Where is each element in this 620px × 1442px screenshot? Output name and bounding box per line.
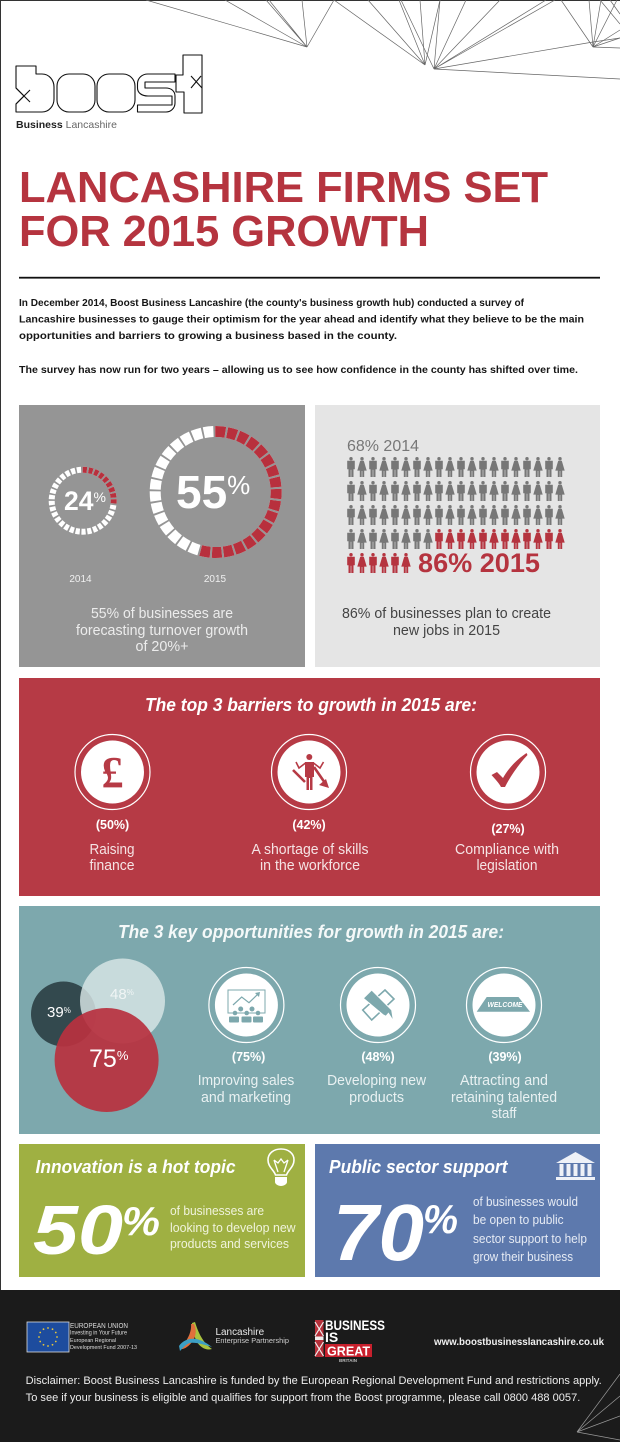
barrier 2 text: in the workforce [260,858,360,874]
icon: tick [470,734,546,810]
big number: 50% [33,1191,160,1269]
description: of businesses are [170,1203,264,1218]
barrier 3 text: Compliance with [455,842,559,858]
caption: 55% of businesses are [91,606,233,622]
description: products and services [170,1236,289,1251]
barrier 3 text [455,822,559,874]
icon: temple [556,1152,595,1180]
big number: 50%: % [122,1198,160,1244]
intro text: opportunities and barriers to growing a business based in the county. [19,331,397,342]
panel: 3 key opportunities [19,906,600,1134]
ring chart: 55% in 2015 [155,432,276,552]
caption [342,606,551,639]
logo: Lancashire Enterprise Partnership [179,1322,289,1351]
opportunity 1 text: (75%) [232,1050,265,1064]
barrier 1 text: finance [90,858,134,874]
pictogram of people [347,457,565,573]
logo: Business is Great Britain [315,1317,385,1363]
opportunity 3 text: Attracting and [460,1073,548,1089]
description [170,1203,296,1251]
description [473,1194,587,1264]
opportunity 1 text: and marketing [201,1090,291,1106]
caption: new jobs in 2015 [393,623,500,639]
opportunity 2 text [327,1050,427,1106]
venn diagram: % [64,1006,71,1015]
logo: Business is Great Britain: IS [325,1329,338,1345]
disclaimer [26,1375,602,1404]
opportunity 3 text [451,1050,557,1122]
label: 55%: 55 [176,466,227,518]
decorative network lines [146,0,620,79]
barrier 2 text [252,818,368,874]
logo: boost Business Lancashire: Business Lancashire [16,119,117,131]
label: 24%: % [93,489,106,505]
label: 86% 2015: 86% 2015 [418,548,540,578]
description: of businesses would [473,1194,578,1209]
title [19,164,548,256]
year labels [69,574,227,585]
icon: pound: £ [102,748,124,797]
disclaimer: To see if your business is eligible and qualifies for support from the Boost programme, please call 0800 488 0057. [26,1392,580,1404]
icon: pencil and ruler [340,968,416,1042]
barrier 3 text: (27%) [491,822,525,836]
footer [0,1290,620,1442]
big number: 70%: 70 [333,1188,424,1277]
logo: boost Business Lancashire [16,55,202,131]
logo: European Union: European Regional [70,1338,116,1344]
heading: The top 3 barriers to growth in 2015 are: [145,695,477,715]
icon: worker and falling arrows [272,734,346,810]
website: www.boostbusinesslancashire.co.uk [433,1336,604,1348]
year labels: 2015 [204,574,227,585]
panel: new jobs [315,405,600,667]
big number: 70%: % [423,1196,458,1242]
panel: innovation [19,1144,305,1277]
barrier 2 text: A shortage of skills [252,842,368,858]
opportunity 3 text: staff [492,1106,517,1122]
barrier 3 text: legislation [476,858,538,874]
opportunity 2 text: Developing new [327,1073,427,1089]
logo: European Union [27,1322,137,1352]
intro text: In December 2014, Boost Business Lancashire (the county's business growth hub) conducted a survey of [19,298,525,309]
heading: Public sector support [329,1157,509,1177]
logo: European Union: Development Fund 2007-13 [70,1345,137,1351]
panel: public sector support [315,1144,600,1277]
panel: turnover growth [19,405,305,667]
panel: top 3 barriers [19,678,600,896]
description: sector support to help [473,1231,587,1246]
icon: welcome mat: WELCOME [488,1002,523,1009]
icon: pound [75,734,150,810]
logo: Business is Great Britain: GREAT [327,1344,370,1358]
ring chart: 24% in 2014 [52,470,114,532]
caption [76,606,248,655]
opportunity 2 text: products [349,1090,404,1106]
description: grow their business [473,1249,573,1264]
logo: Business is Great Britain: BRITAIN [339,1358,357,1363]
icon: welcome mat [466,968,542,1042]
description: be open to public [473,1212,564,1227]
label: 24%: 24 [64,486,94,516]
big number: 50%: 50 [33,1191,123,1269]
intro text: The survey has now run for two years – allowing us to see how confidence in the county has shifted over time. [19,365,578,376]
barrier 1 text [90,818,134,874]
caption: forecasting turnover growth [76,623,248,639]
description: looking to develop new [170,1220,296,1235]
venn diagram [31,958,165,1112]
icon: presentation [209,968,284,1042]
intro text [19,298,584,376]
title: FOR 2015 GROWTH [19,208,429,256]
logo: European Union: Investing in Your Future [70,1330,128,1336]
venn diagram: 48 [110,986,127,1003]
caption: 86% of businesses plan to create [342,606,551,622]
opportunity 3 text: (39%) [488,1050,522,1064]
venn diagram: % [127,988,134,997]
opportunity 1 text: Improving sales [198,1073,294,1089]
disclaimer: Disclaimer: Boost Business Lancashire is funded by the European Regional Development Fund and restrictions apply. [26,1375,602,1387]
barrier 2 text: (42%) [292,818,326,832]
heading: Innovation is a hot topic [36,1157,236,1177]
intro text: Lancashire businesses to gauge their optimism for the year ahead and identify what they believe to be the main [19,314,584,326]
barrier 1 text: Raising [90,842,134,858]
icon: light bulb [268,1149,294,1186]
logo: Lancashire Enterprise Partnership: Lancashire [216,1327,265,1338]
venn diagram: 39 [47,1004,64,1021]
logo: Lancashire Enterprise Partnership: Enterprise Partnership [216,1336,289,1345]
heading: The 3 key opportunities for growth in 2015 are: [118,922,504,942]
year labels: 2014 [69,574,92,585]
logo: Business is Great Britain: BUSINESS [325,1317,385,1333]
opportunity 2 text: (48%) [361,1050,395,1064]
venn diagram: % [117,1048,129,1063]
caption: of 20%+ [136,639,188,655]
opportunity 3 text: retaining talented [451,1090,557,1106]
label: 68% 2014: 68% 2014 [347,438,419,455]
title: LANCASHIRE FIRMS SET [19,164,548,212]
opportunity 1 text [198,1050,294,1106]
label: 55%: % [227,470,250,500]
logo: European Union: EUROPEAN UNION [70,1323,128,1330]
barrier 1 text: (50%) [96,818,129,832]
venn diagram: 75 [89,1045,117,1073]
